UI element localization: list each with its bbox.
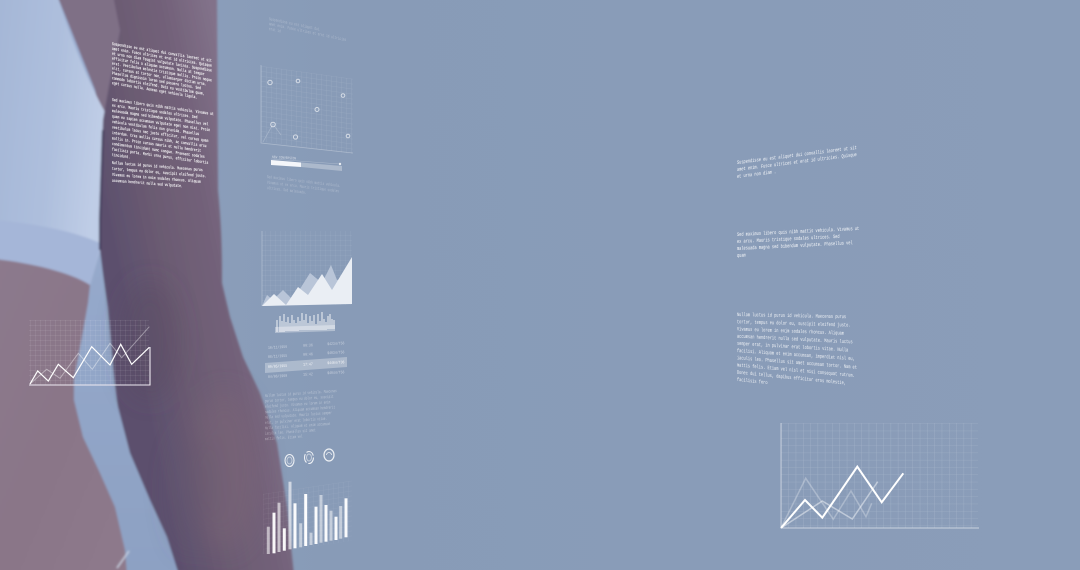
grid	[29, 320, 149, 385]
faint paragraph near arm: eleifend justo. Vivamus eu lorem in enim	[265, 400, 330, 410]
right text block 3: semper erat, in pulvinar erat lobortis vitae. Nulla	[737, 340, 848, 354]
arm paragraph 1: amet enim. Fusce ultrices et erat id ultricies. Quisque	[112, 46, 212, 69]
data table: $4044/T56	[327, 370, 344, 377]
right text block 1: amet enim. Fusce ultrices et erat id ultricies. Quisque	[737, 151, 857, 173]
right text block 3: iaculis leo. Phasellus sit amet accumsan tortor. Nam et	[737, 355, 857, 371]
arm paragraph 3	[112, 161, 206, 192]
histogram strip	[275, 312, 335, 333]
right text block 1: et urna non diam .	[737, 168, 776, 180]
arm paragraph 1: efficitur felis a aliquam accumsan. Nulla at tempor	[112, 56, 205, 78]
faint text block top: amet enim. Fusce ultrices et erat id ultricies	[269, 21, 346, 43]
right text block 2	[737, 225, 859, 259]
right text block 3: accumsan hendrerit nulla sed vulputate. Mauris luctus	[737, 333, 853, 346]
bars	[267, 482, 348, 554]
faint caption: Sed maximus libero quis nibh mattis vehicula.	[267, 174, 341, 189]
faint line	[263, 124, 281, 142]
right text block 3: facilisi. Aliquam et enim accumsan, imperdiet nisl eu,	[737, 347, 855, 363]
arm paragraph 2: facilisis porta. Morbi urna purus, efficitur lobortis	[112, 147, 209, 166]
histogram spikes	[277, 312, 334, 332]
right text block 2: quam	[737, 253, 746, 259]
ring 2	[304, 452, 314, 464]
faint text block top: erat id	[269, 26, 281, 35]
axis	[261, 231, 263, 306]
data table	[265, 341, 347, 380]
arm paragraph 3: Nullam luctus id purus id vehicula. Maecenas purus	[112, 161, 203, 174]
arm paragraph 3: accumsan hendrerit nulla sed vulputate.	[112, 178, 183, 190]
faint caption: ultrices. Sed malesuada.	[267, 185, 306, 196]
arm paragraph 1: eget cursus nulla. Aenean eget vehicula ligula.	[112, 81, 197, 101]
table rows	[268, 341, 344, 351]
light backdrop behind the body	[0, 0, 185, 570]
table rows: $4234/T56	[327, 341, 344, 348]
right text block 1: Suspendisse eu est aliquet dui convallis laoreet ut sit	[737, 144, 857, 166]
arm paragraph 2: ex arcu. Mauris tristique sodales ultrices. Sed	[112, 103, 198, 121]
front area	[262, 257, 352, 306]
right text block 3: facilisis fero	[737, 376, 768, 386]
soft arm shading	[120, 280, 260, 550]
progress line	[271, 159, 340, 164]
faint paragraph near arm: mattis felis. Etiam vel	[265, 434, 303, 443]
right text block 3: Nullam luctus id purus id vehicula. Maecenas purus	[737, 311, 846, 321]
arm paragraph 1: Suspendisse eu est aliquet dui convallis laoreet ut sit	[112, 42, 212, 64]
progress fill	[271, 160, 301, 167]
progress label: NEW CONVERSION	[272, 155, 296, 161]
main series	[781, 467, 903, 528]
right grid	[781, 423, 978, 528]
faint text block top	[269, 16, 346, 48]
scatter chart	[261, 65, 353, 154]
arm paragraph 1	[112, 42, 212, 104]
area chart	[262, 231, 352, 306]
chest skin	[57, 0, 120, 125]
scatter points	[268, 79, 350, 139]
data table: 00:46	[303, 353, 313, 358]
arm paragraph 2: interdum. Cras mollis cursus nibh, ac convallis arcu	[112, 131, 206, 150]
ring 3	[324, 449, 334, 461]
arm paragraph 2: Sed maximus libero quis nibh mattis vehicula. Vivamus ut	[112, 98, 214, 118]
faint paragraph near arm: nulla sed vulputate. Mauris luctus semper	[265, 410, 332, 421]
right axis	[781, 423, 979, 528]
white sports top	[0, 0, 106, 285]
faint text block top: Suspendisse eu est aliquet dui	[269, 16, 319, 33]
forearm warm tone	[190, 390, 260, 550]
histogram base	[275, 325, 335, 333]
arm paragraph 2: quam eu sapien accumsan vulputate eget non nisi. Proin	[112, 114, 211, 134]
highlighted row	[265, 357, 347, 373]
data table: 08/11/1955	[268, 353, 287, 360]
arm paragraph 3: tortor, tempus eu dolor eu, suscipit eleifend justo.	[112, 166, 206, 180]
arm paragraph 3: Vivamus eu lorem in enim sodales rhoncus. Aliquam	[112, 172, 201, 185]
ring icons	[285, 449, 334, 466]
right text block 1	[737, 144, 857, 180]
arm paragraph 2: condimentum tincidunt nunc congue. Praesent sodales	[112, 142, 205, 160]
arm shadow edge	[100, 130, 103, 250]
waistband	[117, 551, 129, 568]
faint paragraph near arm: iaculis leo. Phasellus sit amet	[265, 428, 316, 437]
data table: 15:42	[303, 373, 313, 378]
faint paragraph near arm: Nulla facilisi. Aliquam et enim accumsan	[265, 421, 330, 432]
faint paragraph near arm: purus tortor, tempus eu dolor eu, suscipit	[265, 394, 334, 405]
back area	[262, 265, 352, 306]
faint caption	[267, 174, 341, 200]
faint series b	[781, 482, 878, 528]
axes	[29, 347, 150, 385]
arm paragraph 2: vehicula vestibulum felis non gravida. Phasellus	[112, 120, 200, 138]
right text block 3: Vivamus eu lorem in enim sodales rhoncus. Aliquam	[737, 326, 844, 337]
right text block 3: mattis felis. Etiam vel nisl et nisi consequat rutrum.	[737, 362, 855, 379]
data table: $4034/T56	[327, 350, 344, 357]
scatter axes	[261, 65, 353, 153]
right text block 2: Sed maximus libero quis nibh mattis vehicula. Vivamus ut	[737, 225, 859, 238]
left line chart	[29, 320, 150, 385]
top band	[0, 220, 100, 285]
data table: 09/05/1955	[268, 363, 287, 370]
arm paragraph 1: erat. Vestibulum molestie tristique mollis. Proin neque	[112, 61, 212, 84]
area grid	[262, 231, 352, 305]
faint caption: Vivamus ut ex arcu. Mauris tristique sodales	[267, 180, 339, 195]
ring 1	[285, 454, 294, 466]
arm paragraph 1: Phasellus dignissim lorem sed posuere luctus. Sed	[112, 71, 201, 92]
faint paragraph near arm: sodales rhoncus. Aliquam accumsan hendrerit	[265, 405, 335, 416]
arm text block	[112, 42, 214, 192]
data table: 04/06/1960	[268, 373, 287, 380]
arm paragraph 2	[112, 98, 214, 173]
arm paragraph 1: elit, cursus at tortor non, ullamcorper dictum urna.	[112, 66, 206, 88]
right text block 2: malesuada magna sed bibendum vulputate. Phasellus vel	[737, 240, 853, 252]
arm paragraph 2: vestibulum lacus nec justo efficitur, vel cursus quam	[112, 125, 209, 144]
right text block 3: Donec dui tellus, dapibus efficitur eros molestie,	[737, 369, 846, 387]
bar chart	[263, 481, 352, 554]
right text block 2: ex arcu. Mauris tristique sodales ultrices. Sed	[737, 233, 840, 245]
faint series	[30, 327, 149, 384]
faint paragraph near arm: Nullam luctus id purus id vehicula. Maecenas	[265, 388, 337, 399]
arm paragraph 2: mollis in. Proin cursus mauris et nulla hendrerit	[112, 136, 201, 154]
arm paragraph 2: malesuada magna sed bibendum vulputate. Phasellus vel	[112, 109, 209, 128]
photo: person's torso and arm	[0, 0, 294, 570]
main series	[30, 344, 149, 384]
faint series a	[781, 478, 872, 528]
arm paragraph 1: et urna non diam feugiat vulputate lacinia. Suspendisse	[112, 51, 212, 74]
bar grid	[263, 481, 352, 554]
faint paragraph near arm: erat, in pulvinar erat lobortis vitae.	[265, 416, 327, 426]
right line chart	[781, 423, 979, 528]
forearm inner shade	[170, 430, 210, 550]
arm paragraph 1: commodo lobortis eleifend. Duis eu vestibulum quam,	[112, 76, 205, 97]
table rows: 10/11/1956	[268, 344, 287, 351]
table rows: 00:36	[303, 344, 313, 349]
progress marker	[339, 163, 341, 165]
progress track	[301, 162, 342, 171]
data table: 17:47	[303, 363, 313, 368]
scatter grid	[261, 66, 353, 154]
elbow shading	[120, 280, 180, 400]
data table: $4404/T36	[327, 360, 344, 367]
right text block 3: tortor, tempus eu dolor eu, suscipit eleifend justo.	[737, 319, 850, 329]
progress bar	[271, 155, 342, 171]
arm	[100, 0, 294, 570]
torso	[0, 259, 127, 570]
arm paragraph 2: tincidunt.	[112, 153, 130, 161]
right text block 3	[737, 311, 857, 387]
faint paragraph near arm	[265, 388, 337, 443]
